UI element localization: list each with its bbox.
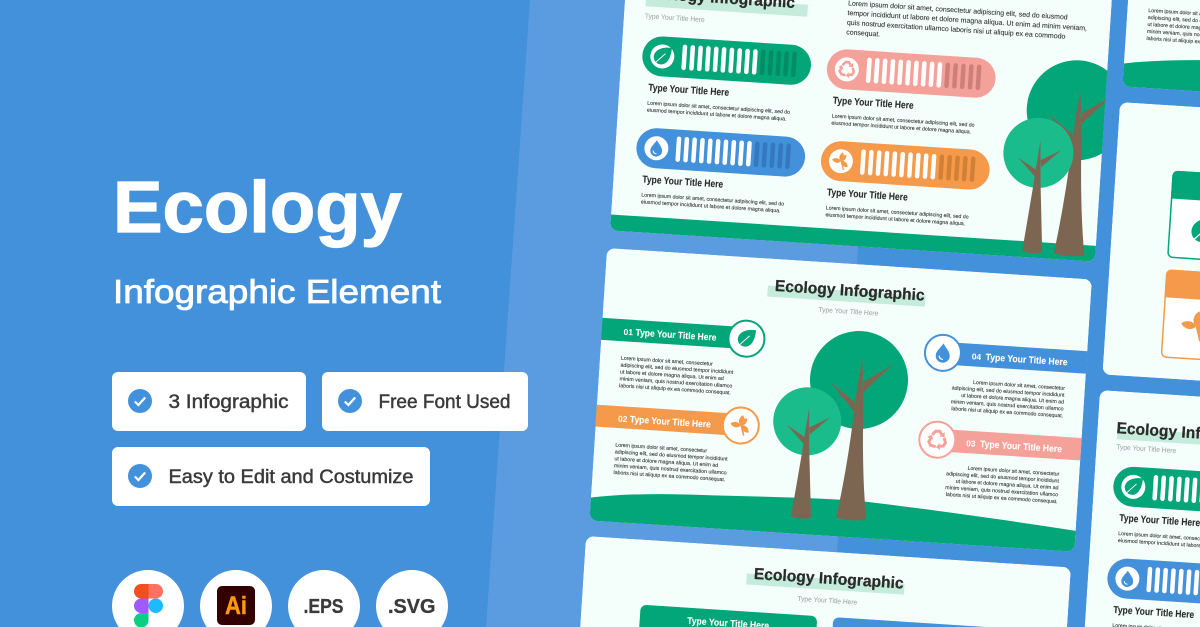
- body 04: laboris nisi ut aliquip ex ea commodo consequat.: [951, 406, 1063, 419]
- green pill: [1112, 466, 1200, 516]
- green pill: [641, 35, 812, 86]
- body 01: Lorem ipsum dolor sit amet, consectetur: [621, 356, 713, 368]
- body 02: ut labore et dolore magna aliqua. Ut enim ad: [614, 456, 718, 469]
- badge: free font used: Free Font Used: [378, 392, 510, 413]
- panel: card 2 ribbons: [588, 248, 1093, 552]
- green pill text: [647, 83, 791, 123]
- orange pill text: [825, 187, 970, 228]
- icon: SVG: [376, 570, 448, 627]
- body 02: adipiscing elit, sed do eiusmod tempor incididunt: [615, 449, 728, 463]
- ribbon 01: 01: [623, 327, 634, 337]
- intro text: consequat.: [846, 29, 880, 38]
- diagonal light band: [486, 0, 875, 627]
- pink pill text: Lorem ipsum dolor sit amet, consectetur adipiscing elit, sed do: [832, 114, 975, 129]
- pink pill: [826, 48, 997, 99]
- body 03: minim veniam, quis nostrud exercitation ullamco: [945, 485, 1058, 498]
- icon: figma: [112, 570, 184, 627]
- body 02: minim veniam, quis nostrud exercitation ullamco: [614, 463, 727, 476]
- blue pill text: [641, 174, 785, 215]
- body 04: [950, 379, 1066, 419]
- pink pill text: [831, 96, 976, 136]
- heading band: [646, 0, 808, 17]
- body 03: [945, 464, 1060, 505]
- body 01: laboris nisi ut aliquip ex ea commodo consequat.: [619, 383, 731, 396]
- body 03: laboris nisi ut aliquip ex ea commodo consequat.: [946, 492, 1058, 505]
- body 02: Lorem ipsum dolor sit amet, consectetur: [615, 442, 708, 454]
- heading band: [1117, 428, 1200, 450]
- big tree: [1026, 60, 1108, 256]
- green pill text: Lorem ipsum dolor sit amet, consectetur adipiscing elit, sed do: [647, 101, 790, 116]
- badge: 3 infographic: [112, 372, 306, 431]
- green box: [1167, 171, 1200, 268]
- footer band: [610, 214, 1096, 262]
- badge: free font used: [322, 372, 528, 431]
- green box: [636, 605, 817, 627]
- body 04: ut labore et dolore magna aliqua. Ut enim ad: [961, 393, 1064, 406]
- heading band: [767, 285, 926, 307]
- blue pill: [635, 127, 806, 178]
- ribbon 03: [918, 420, 1082, 460]
- sub heading: Type Your Title Here: [645, 13, 705, 24]
- body 01: adipiscing elit, sed do eiusmod tempor incididunt: [620, 363, 734, 376]
- blue pill text: Lorem ipsum dolor sit amet, consectetur adipiscing elit, sed do: [641, 192, 784, 208]
- ribbon 02: [596, 404, 760, 444]
- blue pill text: Type Your Title Here: [642, 174, 724, 191]
- body 04: Lorem ipsum dolor sit amet, consectetur: [973, 380, 1065, 392]
- body 01: minim veniam, quis nostrud exercitation ullamco: [619, 376, 733, 390]
- ribbon 02: 02: [618, 414, 628, 424]
- orange pill text: Type Your Title Here: [827, 187, 908, 204]
- pink pill text: Type Your Title Here: [832, 96, 914, 112]
- icon: EPS: [288, 570, 360, 627]
- icon: EPS: .EPS: [304, 596, 344, 618]
- badge: easy to edit: Easy to Edit and Costumize: [168, 467, 414, 488]
- body 01: [619, 356, 734, 396]
- heading: Ecology Infographic: [753, 566, 904, 593]
- heading: Ecology Infographic: [774, 278, 925, 305]
- sub heading: Type Your Title Here: [797, 596, 858, 607]
- panel: card 4 partial: [1123, 0, 1200, 92]
- sub heading: Type Your Title Here: [818, 307, 879, 318]
- ribbon 03: Type Your Title Here: [980, 439, 1062, 455]
- ribbon 04: Type Your Title Here: [985, 352, 1068, 368]
- badge: 3 infographic: 3 Infographic: [168, 392, 288, 413]
- sub heading: Type Your Title Here: [1116, 444, 1177, 455]
- green pill text: Type Your Title Here: [648, 83, 730, 99]
- intro text: tempor incididunt ut labore et dolore magna aliqua. Ut enim ad minim veniam,: [847, 10, 1087, 32]
- intro text: quis nostrud exercitation ullamco laboris nisi ut aliquip ex ea commodo: [847, 20, 1066, 41]
- subtitle: Infographic Element: [113, 273, 441, 310]
- body 01: ut labore et dolore magna aliqua. Ut enim ad: [620, 369, 724, 382]
- footer ground: [590, 494, 1076, 552]
- body 02: laboris nisi ut aliquip ex ea commodo consequat.: [613, 470, 725, 483]
- orange pill: [820, 140, 991, 191]
- blue pill: [1106, 557, 1200, 608]
- main title: Ecology: [113, 168, 402, 248]
- body 03: adipiscing elit, sed do eiusmod tempor incididunt: [946, 471, 1060, 485]
- pink pill text: eiusmod tempor incididunt ut labore et dolore magna aliqua.: [831, 120, 971, 136]
- panel: card 5 boxes: [1102, 102, 1200, 406]
- body text: [1146, 8, 1200, 44]
- panel: card 3 boxes: [568, 536, 1071, 627]
- green pill text: [1118, 513, 1200, 553]
- icon: SVG: .SVG: [388, 596, 436, 618]
- body 03: ut labore et dolore magna aliqua. Ut enim ad: [955, 479, 1059, 491]
- icon: illustrator: Ai: [225, 592, 247, 620]
- big tree: [810, 331, 908, 520]
- badge: easy to edit: [112, 447, 430, 506]
- body 04: minim veniam, quis nostrud exercitation ullamco: [951, 399, 1064, 412]
- orange pill text: eiusmod tempor incididunt ut labore et dolore magna aliqua.: [825, 212, 965, 227]
- icon: illustrator: [200, 570, 272, 627]
- intro text: Lorem ipsum dolor sit amet, consectetur adipiscing elit, sed do eiusmod: [848, 0, 1068, 22]
- blue box: [832, 618, 986, 627]
- footer ground: [1123, 60, 1200, 92]
- ribbon 04: 04: [971, 351, 982, 362]
- panel: card 1 pills: [610, 0, 1135, 263]
- ribbon 02: Type Your Title Here: [630, 414, 711, 431]
- body 02: [613, 442, 729, 483]
- orange box: [1161, 269, 1200, 368]
- ribbon 03: 03: [966, 438, 976, 449]
- small tree: [1003, 118, 1074, 254]
- ribbon 01: [601, 318, 766, 358]
- body 03: Lorem ipsum dolor sit amet, consectetur: [967, 466, 1060, 478]
- small tree: [773, 387, 841, 519]
- green pill text: eiusmod tempor incididunt ut labore et dolore magna aliqua.: [647, 108, 787, 123]
- heading band: [746, 573, 905, 595]
- ribbon 01: Type Your Title Here: [635, 328, 717, 344]
- intro text: [846, 0, 1086, 39]
- panel: card 6 pills: [1082, 390, 1200, 627]
- body 04: adipiscing elit, sed do eiusmod tempor incididunt: [951, 385, 1065, 399]
- ribbon 04: [924, 334, 1088, 374]
- blue pill text: eiusmod tempor incididunt ut labore et dolore magna aliqua.: [641, 199, 781, 214]
- orange pill text: Lorem ipsum dolor sit amet, consectetur adipiscing elit, sed do: [826, 205, 969, 221]
